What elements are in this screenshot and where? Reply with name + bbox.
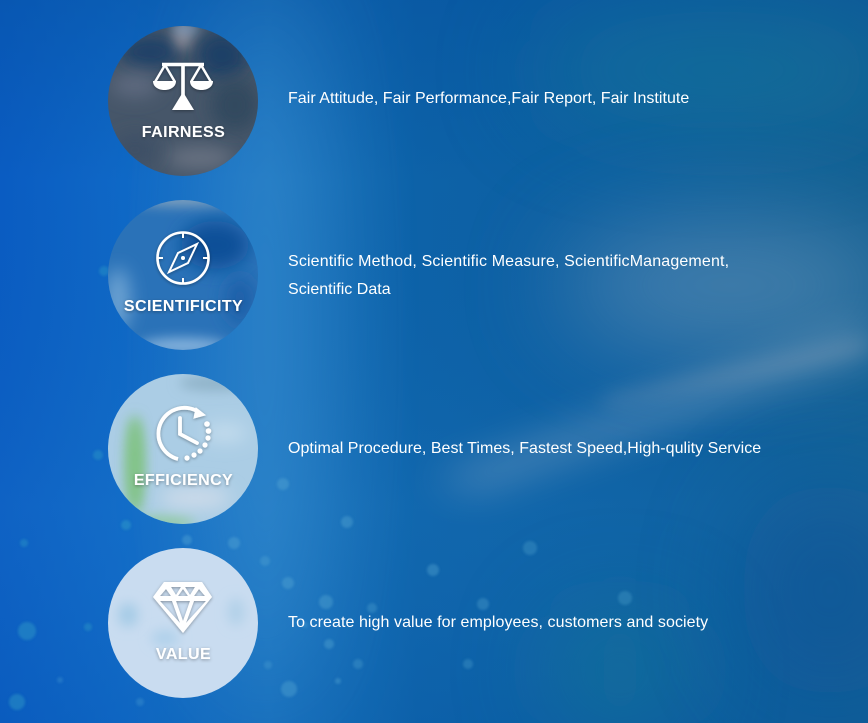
icon: compass [157,232,209,284]
circle: scientificity [108,200,258,580]
icon: clock [158,408,211,461]
circle: fairness [108,26,258,176]
icon: scales [153,64,213,110]
circle: efficiency [108,374,258,524]
label: efficiency: EFFICIENCY [134,472,233,489]
icon: diamond [153,582,212,633]
text: scientificity: Scientific Data [288,281,391,298]
bokeh dots [9,266,632,710]
label: scientificity: SCIENTIFICITY [124,298,243,315]
text: value: To create high value for employees, customers and society [288,614,708,631]
circle: value [108,548,258,698]
label: value: VALUE [156,646,211,663]
text: efficiency: Optimal Procedure, Best Times, Fastest Speed,High-qulity Service [288,440,761,457]
text: fairness: Fair Attitude, Fair Performance,Fair Report, Fair Institute [288,90,689,107]
text: scientificity [288,253,729,298]
label: fairness: FAIRNESS [142,124,225,141]
text: scientificity: Scientific Method, Scientific Measure, ScientificManagement, [288,253,729,270]
